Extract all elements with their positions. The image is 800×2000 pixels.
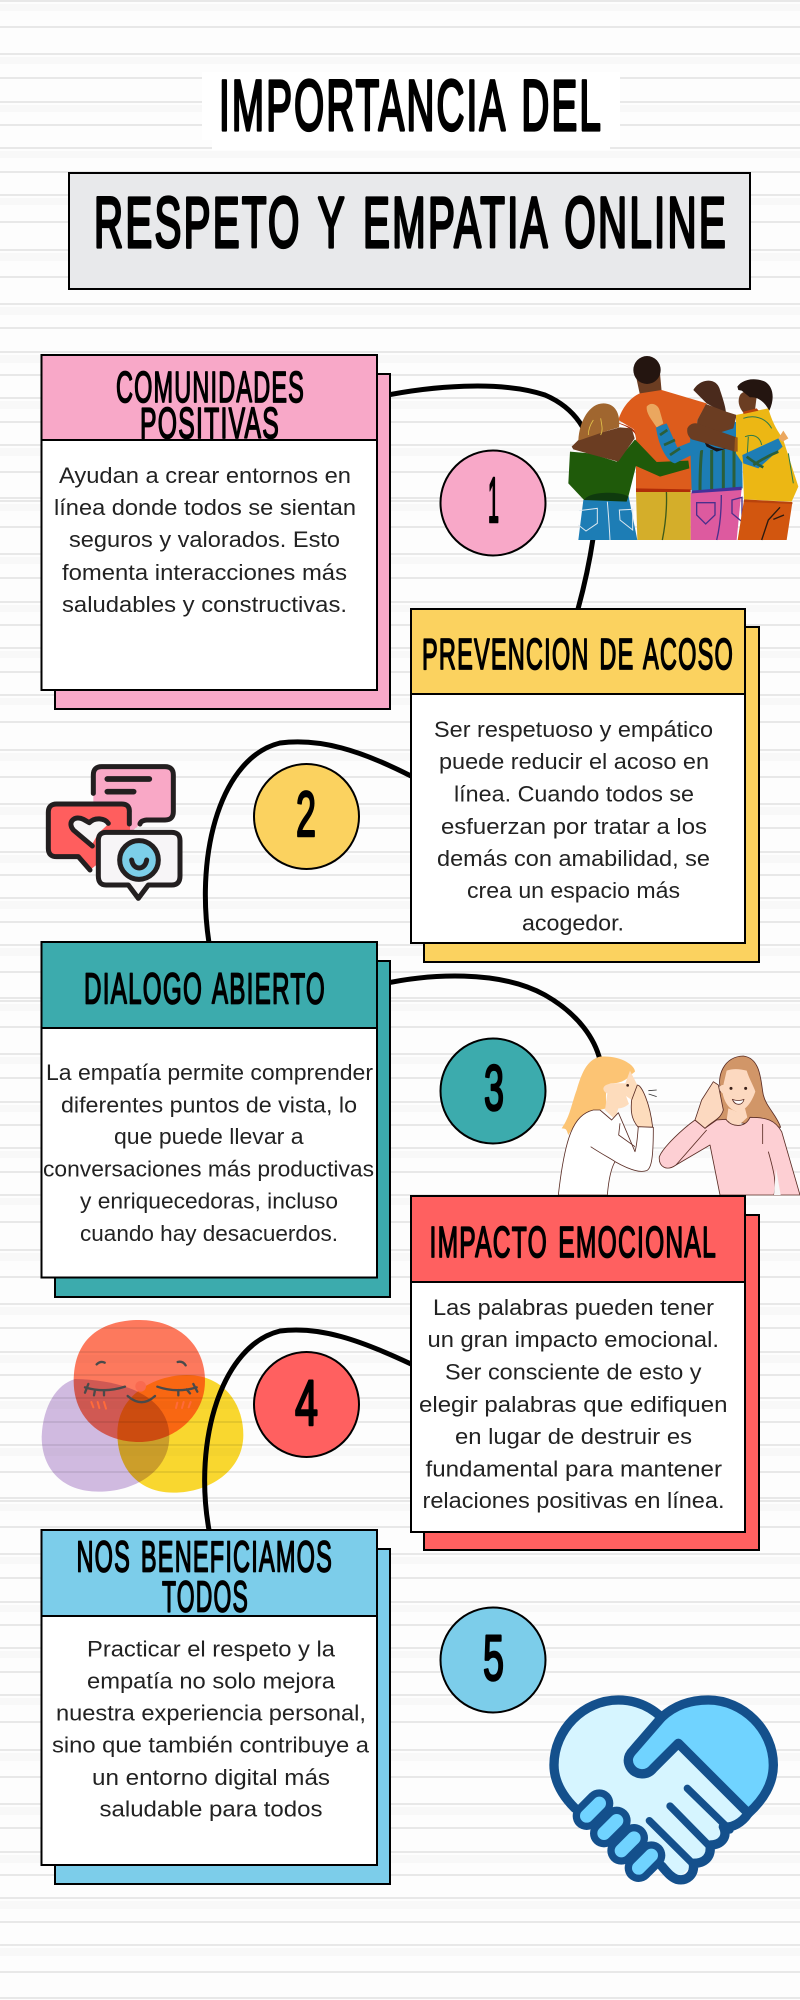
text block: dialogo abierto: que puede llevar a	[114, 1124, 304, 1149]
text block: impacto emocional: elegir palabras que edifiquen	[419, 1392, 728, 1417]
heading: nos beneficiamos todos	[42, 1530, 377, 1622]
text block: impacto emocional: en lugar de destruir es	[455, 1424, 692, 1449]
text block: impacto emocional: Las palabras pueden tener	[433, 1295, 714, 1320]
number badge 1: 1	[488, 464, 499, 536]
text block: comunidades positivas: seguros y valorados. Esto	[69, 527, 340, 552]
text block: dialogo abierto: conversaciones más productivas	[43, 1156, 374, 1182]
text block: comunidades positivas	[54, 463, 356, 617]
text block: nos beneficiamos todos: Practicar el respeto y la	[87, 1637, 336, 1662]
title: line two in grey box	[69, 173, 750, 289]
panel: nos beneficiamos todos	[42, 1530, 390, 1884]
number badge 3: 3	[484, 1052, 504, 1124]
text block: comunidades positivas: fomenta interacciones más	[62, 560, 347, 585]
icon: chat bubbles	[48, 767, 180, 898]
text block: prevencion de acoso: acogedor.	[522, 910, 624, 936]
panel: impacto emocional	[411, 1196, 759, 1550]
text block: impacto emocional: un gran impacto emocional.	[428, 1327, 719, 1352]
text block: dialogo abierto: cuando hay desacuerdos.	[80, 1221, 338, 1246]
text block: nos beneficiamos todos: saludable para todos	[100, 1797, 322, 1822]
number badge 4	[254, 1352, 359, 1457]
heading: comunidades positivas	[42, 355, 377, 448]
icon: group of friends hugging	[568, 356, 798, 540]
arrow: connector from card 2 to card 3	[205, 742, 411, 943]
text block: comunidades positivas: saludables y constructivas.	[62, 592, 347, 617]
text block: prevencion de acoso: línea. Cuando todos se	[454, 782, 694, 806]
heading: nos beneficiamos todos: NOS BENEFICIAMOS	[76, 1532, 333, 1582]
text block: nos beneficiamos todos: sino que también contribuye a	[52, 1733, 370, 1758]
number badge 5	[440, 1608, 546, 1712]
icon: handshake heart	[554, 1700, 773, 1880]
text block: nos beneficiamos todos: empatía no solo mejora	[87, 1669, 336, 1694]
title: line one on white patch	[202, 67, 620, 150]
text block: nos beneficiamos todos: un entorno digital más	[92, 1765, 330, 1790]
text block: comunidades positivas: línea donde todos se sientan	[54, 495, 356, 520]
text block: impacto emocional: Ser consciente de esto y	[445, 1360, 702, 1385]
panel: dialogo abierto	[42, 942, 390, 1297]
number badge 1	[440, 450, 546, 556]
text block: prevencion de acoso	[434, 717, 713, 936]
text block: impacto emocional: fundamental para mantener	[426, 1456, 722, 1482]
text block: comunidades positivas: Ayudan a crear entornos en	[59, 463, 351, 488]
heading: dialogo abierto: DIALOGO ABIERTO	[84, 964, 326, 1014]
text block: dialogo abierto	[43, 1060, 374, 1246]
heading: nos beneficiamos todos: TODOS	[162, 1572, 249, 1622]
text block: prevencion de acoso: Ser respetuoso y empático	[434, 717, 713, 742]
panel: comunidades positivas	[42, 355, 390, 709]
number badge 2: 2	[296, 778, 316, 850]
arrow: connector from card 1 to card 2	[378, 386, 598, 609]
text block: nos beneficiamos todos	[52, 1637, 370, 1822]
arrow: connector from card 3 to illustration	[378, 976, 600, 1060]
number badge 2	[254, 764, 359, 869]
text block: dialogo abierto: La empatía permite comprender	[46, 1060, 373, 1085]
number badge 3	[440, 1038, 546, 1144]
icon: smiling venn circles	[42, 1320, 243, 1493]
text block: prevencion de acoso: puede reducir el acoso en	[439, 749, 709, 774]
heading: dialogo abierto	[42, 942, 377, 1028]
heading: impacto emocional	[411, 1196, 745, 1282]
text block: prevencion de acoso: crea un espacio más	[467, 878, 680, 903]
heading: comunidades positivas: COMUNIDADES	[116, 363, 305, 412]
icon: two women whispering	[558, 1056, 800, 1195]
heading: prevencion de acoso	[411, 609, 745, 694]
text block: dialogo abierto: diferentes puntos de vista, lo	[61, 1092, 357, 1118]
text block: prevencion de acoso: demás con amabilidad, se	[437, 846, 710, 871]
text block: prevencion de acoso: esfuerzan por tratar a los	[441, 814, 707, 839]
heading: comunidades positivas: POSITIVAS	[140, 399, 280, 448]
arrow: connector from card 4 to card 5	[205, 1330, 411, 1530]
panel: prevencion de acoso	[411, 609, 759, 962]
number badge 5: 5	[483, 1622, 504, 1694]
text block: impacto emocional	[419, 1295, 728, 1513]
text block: nos beneficiamos todos: nuestra experiencia personal,	[56, 1701, 366, 1726]
text block: dialogo abierto: y enriquecedoras, incluso	[80, 1188, 338, 1214]
number badge 4: 4	[295, 1367, 318, 1439]
text block: impacto emocional: relaciones positivas en línea.	[422, 1488, 724, 1513]
